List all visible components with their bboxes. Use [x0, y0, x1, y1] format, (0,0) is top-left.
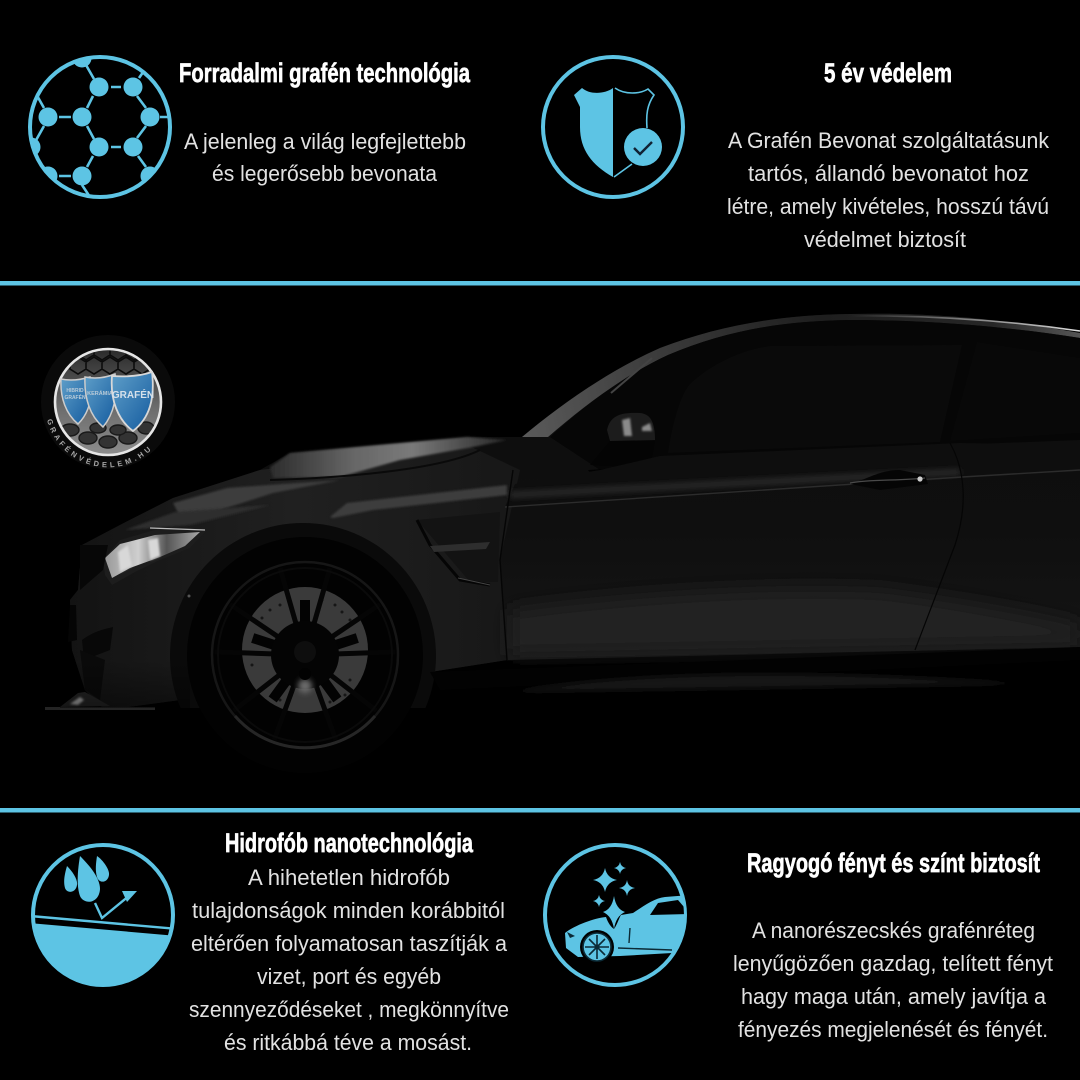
sparkles — [593, 862, 635, 929]
text: shine and colour: hagy maga után, amely javítja a — [741, 984, 1047, 1009]
logo caption: GRAFÉNVÉDELEM.HU — [48, 419, 150, 468]
hood highlights — [270, 437, 507, 478]
text: 5 years protection: A Grafén Bevonat szolgáltatásunk — [728, 128, 1050, 153]
shield: grafén: GRAFÉN — [112, 388, 154, 401]
window surround — [550, 320, 1080, 470]
wheel — [212, 562, 398, 748]
text: shine and colour: fényezés megjelenését és fényét. — [738, 1017, 1048, 1042]
headlight — [103, 527, 207, 585]
text: 5 years protection: védelmet biztosít — [804, 227, 966, 252]
text: shine and colour: lenyűgözően gazdag, telített fényt — [733, 951, 1053, 976]
car — [565, 895, 690, 964]
text: 5 years protection: tartós, állandó bevonatot hoz — [748, 161, 1029, 186]
mirror — [607, 413, 655, 441]
icon: graphene circle — [22, 48, 172, 200]
text: hydrophobic nanotechnology: A hihetetlen hidrofób — [248, 865, 450, 890]
door seams — [500, 470, 513, 660]
fender vent — [417, 512, 500, 585]
text: graphene technology — [184, 129, 466, 186]
car photograph — [45, 314, 1080, 789]
text: 5 years protection: létre, amely kivételes, hosszú távú — [727, 194, 1049, 219]
roof and a-pillar — [522, 314, 1080, 437]
text: hydrophobic nanotechnology: eltérően folyamatosan taszítják a — [191, 931, 508, 956]
brake disc — [242, 587, 368, 713]
shield: kerámia: KERÁMIA — [87, 390, 113, 397]
text: hydrophobic nanotechnology: vizet, port és egyéb — [257, 964, 441, 989]
text: hydrophobic nanotechnology: szennyeződéseket , megkönnyítve — [189, 997, 509, 1022]
front grille and intake — [80, 545, 108, 590]
text: graphene technology: A jelenleg a világ legfejlettebb — [184, 129, 466, 154]
door handle — [850, 470, 928, 490]
text: hydrophobic nanotechnology: és ritkábbá téve a mosást. — [224, 1030, 472, 1055]
text: hydrophobic nanotechnology — [189, 865, 509, 1055]
text: shine and colour — [733, 918, 1053, 1042]
divider: top — [0, 281, 1080, 286]
icon: hydrophobic surface — [28, 845, 178, 990]
icon: shiny car — [545, 845, 690, 985]
text: 5 years protection — [727, 128, 1050, 252]
icon: shield with check — [543, 57, 683, 197]
wheel arch — [170, 523, 436, 708]
text: hydrophobic nanotechnology: tulajdonságok minden korábbitól — [192, 898, 505, 923]
divider: bottom — [0, 808, 1080, 812]
lower door reflection — [510, 589, 1080, 655]
shield: hibrid — [61, 377, 91, 424]
text: graphene technology: és legerősebb bevonata — [212, 161, 438, 186]
heading: 5 years protection: 5 év védelem — [824, 58, 952, 88]
sill and shadow — [430, 647, 1080, 690]
beltline band — [505, 443, 1080, 507]
logo: grafénvédelem badge — [41, 335, 175, 469]
spokes — [215, 568, 395, 740]
hub highlight — [298, 679, 312, 693]
arrow — [95, 891, 137, 918]
text: shine and colour: A nanorészecskés grafénréteg — [752, 918, 1035, 943]
shield: hibrid: HIBRID — [66, 388, 84, 394]
splitter — [45, 707, 155, 710]
shield: hibrid: GRAFÉN — [64, 393, 86, 401]
heading: graphene technology: Forradalmi grafén technológia — [179, 58, 471, 88]
drops — [64, 856, 109, 902]
heading: hydrophobic nanotechnology: Hidrofób nanotechnológia — [225, 828, 474, 858]
side windows — [668, 345, 962, 453]
